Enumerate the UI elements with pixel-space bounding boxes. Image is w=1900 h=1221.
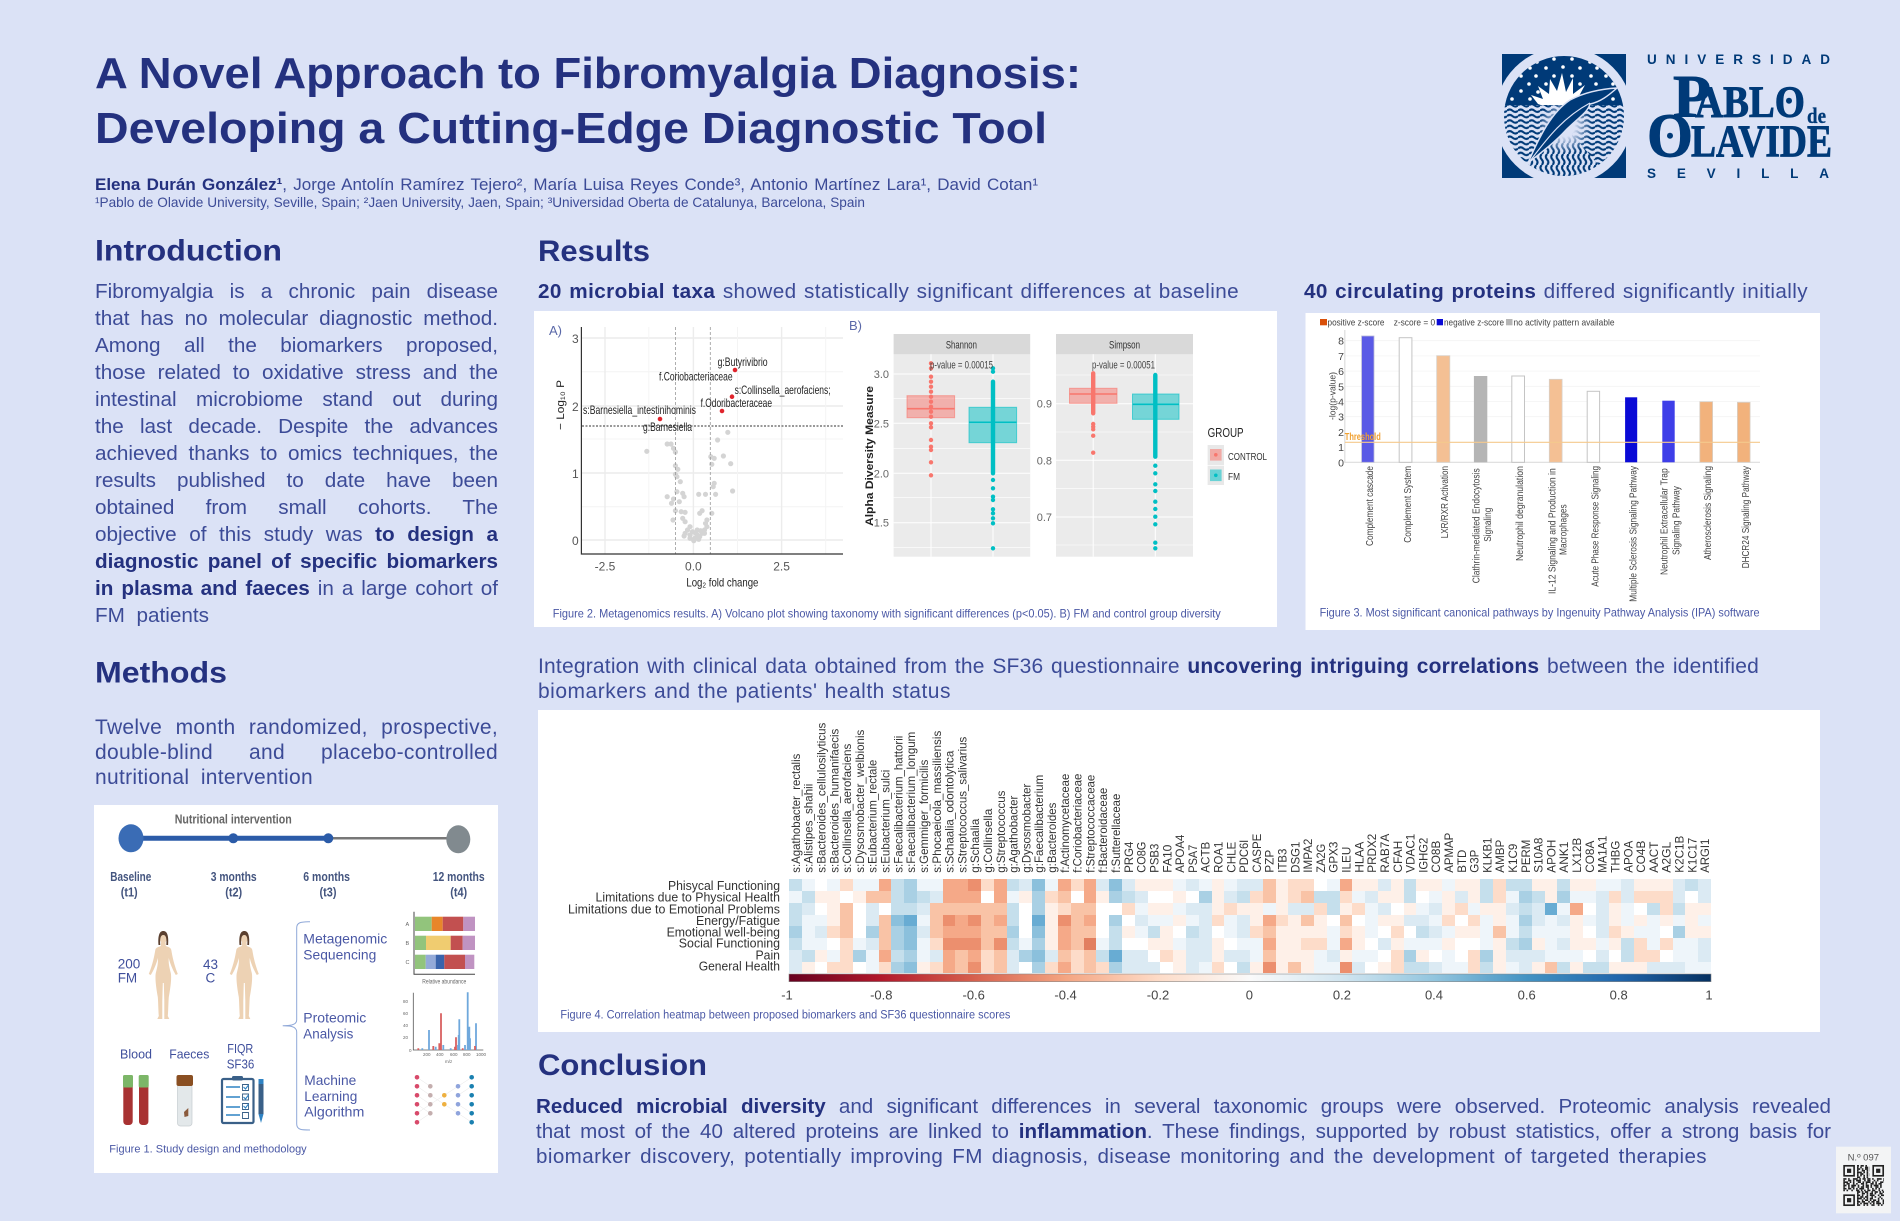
heatmap: column labels: THBG	[1608, 841, 1622, 873]
analysis labels: Metagenomic	[303, 930, 387, 946]
chart: relative abundance bars: C	[406, 960, 410, 966]
sample labels: SF36	[227, 1057, 254, 1072]
legend: z-score: z-score = 0	[1394, 317, 1435, 328]
chart: mass spectrum: 600	[450, 1052, 458, 1057]
heatmap: column labels: PSA7	[1186, 844, 1200, 873]
text block: introduction: that has no molecular diagnostic method.	[95, 307, 498, 330]
text block: methods: double-blind and placebo-controlled	[95, 741, 498, 764]
cohort labels: 43	[203, 957, 218, 972]
chart: alpha diversity boxplots	[849, 318, 1267, 557]
text block: integration with clinical data: Integration with clinical data obtained from the SF36 questionnaire uncovering intriguing correlations between the identified	[538, 655, 1759, 678]
bar chart: pathways: Signaling	[1482, 508, 1494, 542]
bar chart: pathways: Multiple Sclerosis Signaling Pathway	[1627, 465, 1639, 602]
analysis labels: Learning	[304, 1088, 357, 1104]
chart: volcano plot: Log₂ fold change	[686, 576, 759, 590]
chart: mass spectrum: 200	[423, 1052, 431, 1057]
heatmap: column labels: f:Actinomycetaceae	[1058, 773, 1072, 873]
heatmap: column labels: CO8B	[1429, 841, 1443, 873]
title: A Novel Approach to Fibromyalgia Diagnosis:	[95, 49, 1081, 98]
legend: z-score: no activity pattern available	[1514, 317, 1614, 328]
chart: alpha diversity boxplots: 3.0	[874, 369, 889, 381]
heading: Introduction: Introduction	[95, 235, 282, 268]
heatmap: column labels: VDAC1	[1404, 833, 1418, 873]
icon: body control	[230, 931, 259, 1019]
chart: mass spectrum: 60	[403, 1011, 409, 1016]
heading: Results: Results	[538, 235, 650, 268]
heatmap: column labels: IGHG2	[1416, 837, 1430, 873]
chart: alpha diversity boxplots: Alpha Diversity Measure	[864, 386, 876, 526]
timeline: 12 months	[433, 870, 485, 884]
heatmap: colour bar: -0.6	[962, 987, 985, 1002]
timeline: (t4)	[450, 886, 467, 900]
sample labels	[120, 1041, 254, 1072]
caption: Figure 3: Figure 3. Most significant canonical pathways by Ingenuity Pathway Analysis (IPA) software	[1320, 606, 1760, 620]
subheading: microbial taxa: 20 microbial taxa showed statistically significant differences at baseline	[538, 280, 1239, 303]
text block: introduction: diagnostic panel of specific biomarkers	[95, 550, 498, 573]
bar chart: pathways: -log(p-value)	[1328, 372, 1338, 420]
legend: z-score: positive z-score	[1328, 317, 1384, 328]
heatmap: column labels: s:Alistipes_shahii	[802, 784, 816, 873]
heatmap: column labels: MA1A1	[1596, 835, 1610, 873]
chart: volcano plot: 1	[572, 467, 579, 481]
heatmap: row labels	[568, 879, 780, 974]
chart: mass spectrum	[403, 992, 487, 1064]
timeline	[110, 811, 485, 900]
bar chart: pathways: DHCR24 Signaling Pathway	[1740, 465, 1752, 568]
heatmap: column labels: GPX3	[1327, 841, 1341, 873]
heatmap: column labels: s:Gemmiger_formicilis	[917, 760, 931, 873]
heatmap: column labels: ROA1	[1212, 841, 1226, 873]
text block: introduction: those related to oxidative stress and the	[95, 361, 498, 384]
heading: Methods: Methods	[95, 657, 227, 690]
logo wordmark: UNIVERSIDAD	[1647, 52, 1830, 67]
cohort labels: FM	[118, 971, 137, 986]
text block: conclusion: biomarker discovery, potentially improving FM diagnosis, disease monitoring and the development of targeted therapies	[536, 1145, 1707, 1168]
chart: alpha diversity boxplots: 0.7	[1037, 512, 1052, 524]
text block: introduction: FM patients	[95, 604, 209, 627]
heading: Conclusion: Conclusion	[538, 1049, 707, 1082]
heatmap: cells	[789, 879, 1711, 973]
bar chart: pathways: Macrophages	[1557, 504, 1569, 555]
panel: Figure 3 canonical pathways	[1306, 313, 1820, 630]
legend: z-score: negative z-score	[1444, 317, 1504, 328]
chart: alpha diversity boxplots: 1.5	[874, 518, 889, 530]
logo wordmark: P	[1673, 64, 1711, 130]
heatmap: column labels: ARGI1	[1698, 838, 1712, 873]
heatmap: column labels: K1C9	[1506, 843, 1520, 873]
heatmap: colour bar: 1	[1705, 987, 1713, 1002]
heatmap: column labels: PRG4	[1122, 841, 1136, 873]
heatmap: colour bar: -0.2	[1147, 987, 1169, 1002]
chart: volcano plot: f.Coriobacteriaceae	[659, 370, 733, 384]
heatmap: row labels: Energy/Fatigue	[696, 914, 780, 928]
chart: relative abundance bars: B	[406, 941, 410, 947]
heatmap: column labels: RAB7A	[1378, 834, 1392, 873]
heatmap: column labels: BTD	[1455, 849, 1469, 873]
heatmap: column labels: s:Collinsella_aerofaciens	[840, 744, 854, 873]
chart: volcano plot: − Log₁₀ P	[555, 380, 567, 430]
heatmap: column labels: f:Coriobacteriaceae	[1071, 773, 1085, 873]
bar chart: pathways: 3	[1338, 412, 1344, 424]
text block: introduction: objective of this study was to design a	[95, 523, 498, 546]
logo wordmark: de	[1807, 103, 1826, 128]
bar chart: pathways: Neutrophil degranulation	[1514, 466, 1526, 561]
timeline: 6 months	[303, 870, 350, 884]
heatmap: column labels: g:Dysosmobacter	[1019, 784, 1033, 873]
title: Developing a Cutting-Edge Diagnostic Tool	[95, 104, 1047, 153]
text block: methods: Twelve month randomized, prospective,	[95, 716, 498, 739]
heatmap: column labels: s:Eubacterium_sulci	[878, 770, 892, 873]
chart: alpha diversity boxplots: 2.5	[874, 418, 889, 430]
heatmap: colour bar	[781, 974, 1713, 1002]
icon: faeces tube	[176, 1075, 193, 1126]
heatmap: column labels: f:Streptococcaceae	[1083, 774, 1097, 873]
heatmap: column labels: ILEU	[1340, 847, 1354, 873]
chart: volcano plot: s:Barnesiella_intestinihominis	[583, 403, 696, 417]
chart: mass spectrum: 400	[436, 1052, 444, 1057]
logo wordmark: SEVILLA	[1647, 166, 1829, 181]
heatmap: column labels: g:Collinsella	[981, 808, 995, 873]
subheading: circulating proteins: 40 circulating proteins differed significantly initially	[1304, 280, 1808, 303]
timeline: Nutritional intervention	[175, 811, 292, 826]
heatmap: column labels: s:Eubacterium_rectale	[866, 759, 880, 873]
heatmap: column labels: APOA4	[1173, 834, 1187, 873]
text block: conclusion: that most of the 40 altered proteins are linked to inflammation. These findings, supported by robust statistics, offer a strong basis for	[536, 1120, 1831, 1143]
bar chart: pathways: Acute Phase Response Signaling	[1590, 466, 1602, 587]
heatmap: column labels: s:Faecalibacterium_longum	[904, 732, 918, 873]
heatmap: colour bar: 0	[1246, 987, 1253, 1002]
heatmap: row labels: Pain	[756, 948, 780, 962]
text block: conclusion: Reduced microbial diversity and significant differences in several taxonomic groups were observed. Proteomic analysis revealed	[536, 1095, 1831, 1118]
heatmap: column labels: f:Bacteroidaceae	[1096, 787, 1110, 873]
logo wordmark	[1647, 52, 1832, 181]
heatmap: column labels: A2GL	[1660, 841, 1674, 873]
analysis labels	[303, 930, 387, 1120]
chart: mass spectrum: 800	[463, 1052, 471, 1057]
text block: introduction: in plasma and faeces in a large cohort of	[95, 577, 498, 600]
heatmap: column labels: PRDX2	[1365, 833, 1379, 873]
text block: introduction: intestinal microbiome stand out during	[95, 388, 498, 411]
legend: group: FM	[1228, 471, 1240, 483]
heatmap: column labels: s:Agathobacter_rectalis	[789, 754, 803, 873]
heatmap: column labels: f:Sutterellaceae	[1109, 793, 1123, 873]
text block: integration with clinical data: biomarkers and the patients' health status	[538, 680, 951, 703]
affiliations: ¹Pablo de Olavide University, Seville, Spain; ²Jaen University, Jaen, Spain; ³Universidad Oberta de Catalunya, Barcelona, Spain	[95, 195, 865, 210]
analysis labels: Algorithm	[304, 1104, 364, 1120]
text block: introduction: Among all the biomarkers proposed,	[95, 334, 498, 357]
text block: methods: nutritional intervention	[95, 766, 313, 789]
cohort labels: C	[206, 971, 216, 986]
chart: alpha diversity boxplots: 0.9	[1037, 399, 1052, 411]
bar chart: pathways: 6	[1338, 366, 1344, 378]
timeline: (t1)	[121, 886, 138, 900]
chart: volcano plot: 2	[572, 400, 579, 414]
bar chart: pathways: 7	[1338, 351, 1344, 363]
bar chart: pathways: 8	[1338, 336, 1344, 348]
heatmap: column labels: PERM	[1519, 840, 1533, 873]
text block: introduction: the last decade. Despite the advances	[95, 415, 498, 438]
heatmap: column labels: ZA2G	[1314, 844, 1328, 873]
text block: methods	[95, 715, 498, 791]
chart: volcano plot: g:Barnesiella	[643, 420, 692, 434]
heatmap: column labels: LX12B	[1570, 838, 1584, 873]
panel: Figure 4 correlation heatmap	[538, 710, 1820, 1032]
heatmap: colour bar: 0.2	[1333, 987, 1351, 1002]
heatmap: column labels: s:Streptococcus_salivarius	[955, 737, 969, 873]
heatmap: row labels: Limitations due to Physical Health	[596, 891, 780, 905]
chart: volcano plot: 2.5	[773, 560, 790, 574]
heatmap: column labels: ACTB	[1199, 842, 1213, 873]
icon: blood tubes	[123, 1075, 149, 1125]
heatmap: column labels: CO8G	[1135, 842, 1149, 873]
heatmap: colour bar: 0.6	[1518, 987, 1536, 1002]
chart: neural network	[415, 1075, 474, 1125]
logo wordmark: LAVIDE	[1691, 117, 1832, 167]
legend: group: CONTROL	[1228, 451, 1267, 463]
chart: mass spectrum: 20	[403, 1035, 409, 1040]
heatmap: row labels: Emotional well-being	[667, 926, 780, 940]
QR badge: N.º 097	[1848, 1153, 1879, 1164]
caption: Figure 4: Figure 4. Correlation heatmap between proposed biomarkers and SF36 questionnaire scores	[560, 1009, 1011, 1021]
analysis labels: Sequencing	[303, 946, 376, 962]
chart: volcano plot: -2.5	[595, 560, 616, 574]
heatmap: column labels: g:Bacteroides	[1045, 803, 1059, 873]
text block: integration with clinical data	[538, 654, 1759, 704]
heatmap: column labels: CHLE	[1224, 842, 1238, 873]
heatmap: column labels: ITB3	[1276, 848, 1290, 873]
cohort labels	[118, 956, 218, 986]
heatmap: row labels: Limitations due to Emotional Problems	[568, 902, 780, 916]
icon: body FM	[149, 931, 178, 1019]
text block: introduction: achieved thanks to omics techniques, the	[95, 442, 498, 465]
chart: relative abundance bars	[406, 912, 475, 985]
icon: university emblem	[1502, 54, 1626, 178]
chart: alpha diversity boxplots: p-value = 0.00015	[930, 359, 993, 371]
bar chart: pathways: IL-12 Signaling and Production in	[1546, 468, 1558, 594]
panel: Figure 1 study design	[94, 805, 498, 1173]
chart: mass spectrum: 0	[409, 1048, 412, 1053]
chart: alpha diversity boxplots: Simpson	[1109, 340, 1140, 352]
chart: relative abundance bars: Relative abundance	[422, 978, 467, 985]
bar chart: pathways: Atherosclerosis Signaling	[1702, 466, 1714, 560]
bar chart: pathways: Complement cascade	[1364, 466, 1376, 546]
heatmap: column labels: APMAP	[1442, 833, 1456, 873]
heatmap: row labels: Social Functioning	[679, 936, 780, 950]
bar chart: pathways: 4	[1338, 396, 1344, 408]
heatmap: column labels: g:Streptococcus	[994, 791, 1008, 873]
chart: mass spectrum: 1000	[476, 1052, 487, 1057]
bar chart: pathways: Threshold	[1345, 432, 1381, 443]
timeline: (t2)	[225, 886, 242, 900]
heatmap: column labels: ANK1	[1557, 841, 1571, 873]
legend: group: GROUP	[1208, 426, 1244, 440]
heatmap: column labels: CO4B	[1634, 841, 1648, 873]
heatmap: column labels: AMBP	[1493, 840, 1507, 873]
chart: alpha diversity boxplots: p-value = 0.00051	[1092, 359, 1155, 371]
chart: alpha diversity boxplots: 2.0	[874, 468, 889, 480]
heatmap: column labels: FA10	[1160, 844, 1174, 873]
analysis labels: Analysis	[303, 1025, 353, 1041]
timeline: Baseline	[110, 870, 151, 884]
bar chart: pathways: 5	[1338, 381, 1344, 393]
heatmap: column labels: g:Agathobacter	[1007, 796, 1021, 873]
bar chart: pathways: Complement System	[1402, 466, 1414, 543]
bar chart: pathways: Clathrin-mediated Endocytosis	[1471, 468, 1483, 583]
panel: Figure 2 metagenomics	[534, 311, 1277, 627]
heatmap: column labels: PSB3	[1148, 843, 1162, 873]
bar chart: pathways: Neutrophil Extracellular Trap	[1658, 468, 1670, 575]
bar chart: pathways: Signaling Pathway	[1670, 485, 1682, 555]
heatmap: column labels: AACT	[1647, 841, 1661, 873]
heatmap: column labels: K2C1B	[1672, 836, 1686, 873]
heatmap: column labels: PZP	[1263, 850, 1277, 873]
heatmap: column labels: APOH	[1544, 840, 1558, 873]
heatmap: colour bar: -0.8	[870, 987, 893, 1002]
logo wordmark: O	[1647, 103, 1693, 171]
heatmap: column labels: s:Bacteroides_cellulosilyticus	[814, 723, 828, 873]
chart: volcano plot: f.Odoribacteraceae	[701, 396, 772, 410]
chart: alpha diversity boxplots: B)	[849, 318, 862, 333]
chart: mass spectrum: 40	[403, 1023, 409, 1028]
bar chart: pathways: 0	[1338, 457, 1344, 469]
sample labels: Faeces	[169, 1047, 210, 1062]
cohort labels: 200	[118, 956, 140, 971]
chart: mass spectrum: m/z	[445, 1059, 453, 1064]
caption: Figure 1: Figure 1. Study design and methodology	[109, 1144, 307, 1156]
chart: volcano plot: g:Butyrivibrio	[718, 355, 768, 369]
heatmap: row labels: Phisycal Functioning	[668, 879, 780, 893]
bar chart: pathways: 2	[1338, 427, 1344, 439]
bar chart: pathways	[1328, 330, 1760, 602]
text block: introduction: Fibromyalgia is a chronic pain disease	[95, 280, 498, 303]
analysis labels: Proteomic	[303, 1010, 366, 1026]
heatmap: colour bar: -1	[781, 987, 793, 1002]
chart: alpha diversity boxplots: 0.8	[1037, 455, 1052, 467]
timeline: (t3)	[320, 886, 336, 900]
heatmap: column labels: PDC6I	[1237, 840, 1251, 873]
heatmap: column labels: CASPE	[1250, 834, 1264, 873]
heatmap: column labels: s:Dysosmobacter_welbionis	[853, 730, 867, 873]
chart: volcano plot: 0	[572, 534, 579, 548]
chart: volcano plot: 3	[572, 332, 579, 346]
bar chart: pathways: LXR/RXR Activation	[1439, 466, 1451, 538]
bracket	[283, 922, 310, 1130]
heatmap: column labels: K1C17	[1685, 837, 1699, 873]
text block: conclusion	[536, 1094, 1831, 1170]
heatmap: column labels: S10A8	[1532, 837, 1546, 873]
heatmap: column labels: APOA	[1621, 841, 1635, 873]
chart: relative abundance bars: A	[406, 922, 410, 928]
title	[95, 49, 1081, 153]
legend: z-score	[1320, 317, 1614, 328]
heatmap: column labels: IMPA2	[1301, 838, 1315, 873]
legend: group	[1208, 426, 1267, 485]
sample labels: FIQR	[227, 1041, 253, 1056]
heatmap: column labels: CO8A	[1583, 841, 1597, 873]
heatmap: colour bar: 0.4	[1425, 987, 1443, 1002]
heatmap: colour bar: -0.4	[1054, 987, 1077, 1002]
analysis labels: Machine	[304, 1072, 357, 1088]
text block: introduction: obtained from small cohorts. The	[95, 496, 498, 519]
logo: Universidad Pablo de Olavide	[1502, 54, 1830, 178]
heatmap: colour bar: 0.8	[1610, 987, 1628, 1002]
heatmap: row labels: General Health	[699, 960, 780, 974]
bar chart: pathways: 1	[1338, 442, 1344, 454]
heatmap: column labels: g:Schaalia	[968, 818, 982, 873]
heatmap: column labels	[789, 723, 1712, 873]
chart: mass spectrum: 80	[403, 999, 409, 1004]
sample labels: Blood	[120, 1047, 152, 1062]
heatmap: column labels: s:Bacteroides_humanifaecis	[827, 729, 841, 873]
caption: Figure 2: Figure 2. Metagenomics results. A) Volcano plot showing taxonomy with significant differences (p<0.05). B) FM and control group diversity	[553, 606, 1221, 620]
heatmap: column labels: s:Schaalia_odontolytica	[943, 750, 957, 873]
icon: QR code	[1843, 1166, 1884, 1205]
heatmap: column labels: G3P	[1468, 850, 1482, 873]
heatmap: column labels: DSG1	[1288, 841, 1302, 873]
heatmap: column labels: g:Faecalibacterium	[1032, 775, 1046, 873]
chart: volcano plot: s:Collinsella_aerofaciens;	[735, 383, 831, 397]
text block: introduction	[95, 278, 498, 630]
heatmap: column labels: HLAA	[1352, 842, 1366, 873]
authors: Elena Durán González¹, Jorge Antolín Ramírez Tejero², María Luisa Reyes Conde³, Antonio Martínez Lara¹, David Cotan¹	[95, 175, 1038, 194]
heatmap: column labels: s:Phocaeicola_massiliensis	[930, 731, 944, 873]
heatmap: column labels: CFAH	[1391, 841, 1405, 873]
heatmap: column labels: KLKB1	[1480, 837, 1494, 873]
icon: clipboard and pen	[222, 1076, 264, 1123]
chart: volcano plot: A)	[549, 323, 562, 338]
heatmap: column labels: s:Faecalibacterium_hattorii	[891, 736, 905, 873]
logo wordmark: ABLO	[1695, 78, 1805, 127]
timeline: 3 months	[211, 870, 257, 884]
chart: volcano plot: 0.0	[685, 560, 702, 574]
chart: alpha diversity boxplots: Shannon	[946, 340, 977, 352]
text block: introduction: results published to date have been	[95, 469, 498, 492]
QR badge	[1836, 1147, 1891, 1213]
chart: volcano plot	[549, 323, 843, 590]
